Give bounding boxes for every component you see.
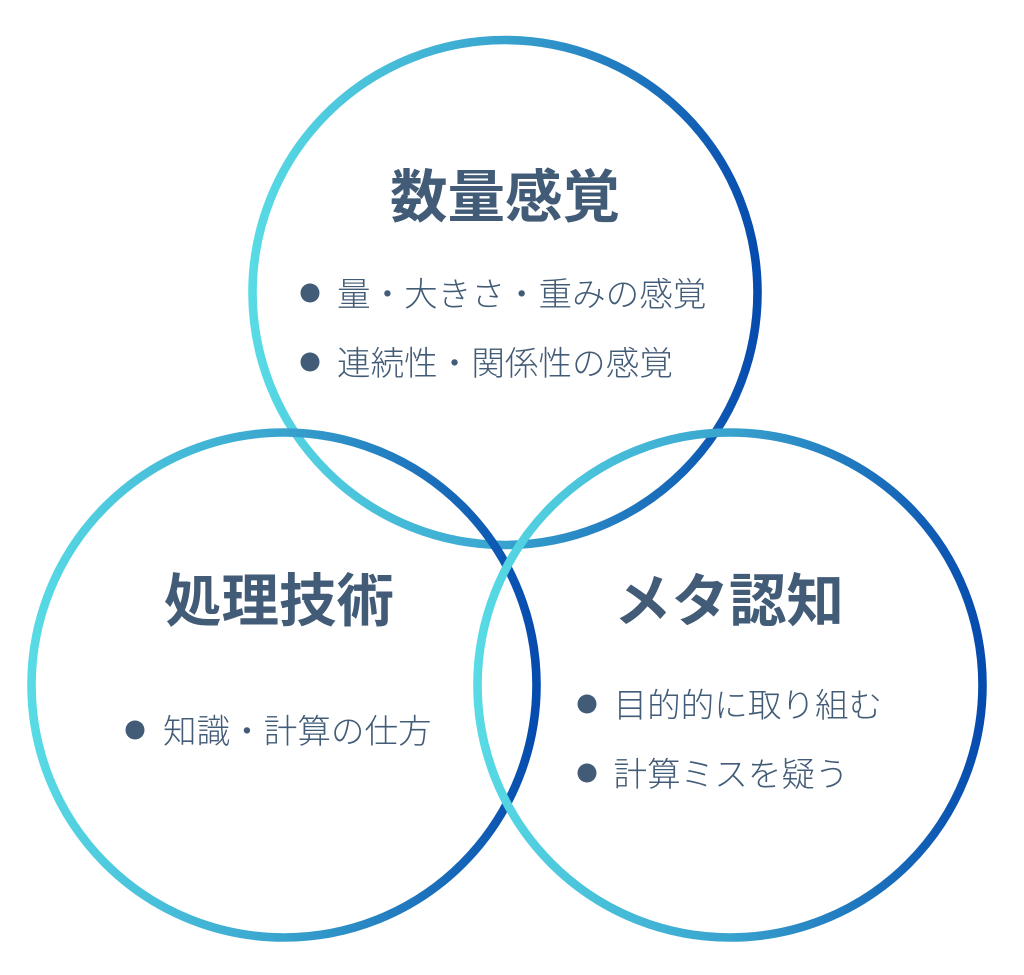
circle: 数量感覚 [252, 40, 758, 545]
panel: 処理技術 [126, 570, 432, 751]
heading: 数量感覚: 数量感覚 [390, 166, 620, 230]
bullet item: 量・大きさ・重みの感覚: 量・大きさ・重みの感覚 [337, 277, 706, 314]
panel: 数量感覚 [300, 166, 706, 383]
panel: メタ認知 [578, 570, 882, 794]
heading: 処理技術: 処理技術 [164, 570, 394, 634]
bullet item: 知識・計算の仕方: 知識・計算の仕方 [163, 714, 432, 751]
circle: 処理技術 [32, 432, 536, 938]
bullet item: 計算ミスを疑う: 計算ミスを疑う [614, 757, 849, 794]
heading: メタ認知: メタ認知 [614, 570, 844, 634]
bullet item: 目的的に取り組む: 目的的に取り組む [614, 687, 882, 725]
circle: メタ認知 [478, 432, 982, 938]
bullet item: 連続性・関係性の感覚: 連続性・関係性の感覚 [337, 346, 673, 383]
